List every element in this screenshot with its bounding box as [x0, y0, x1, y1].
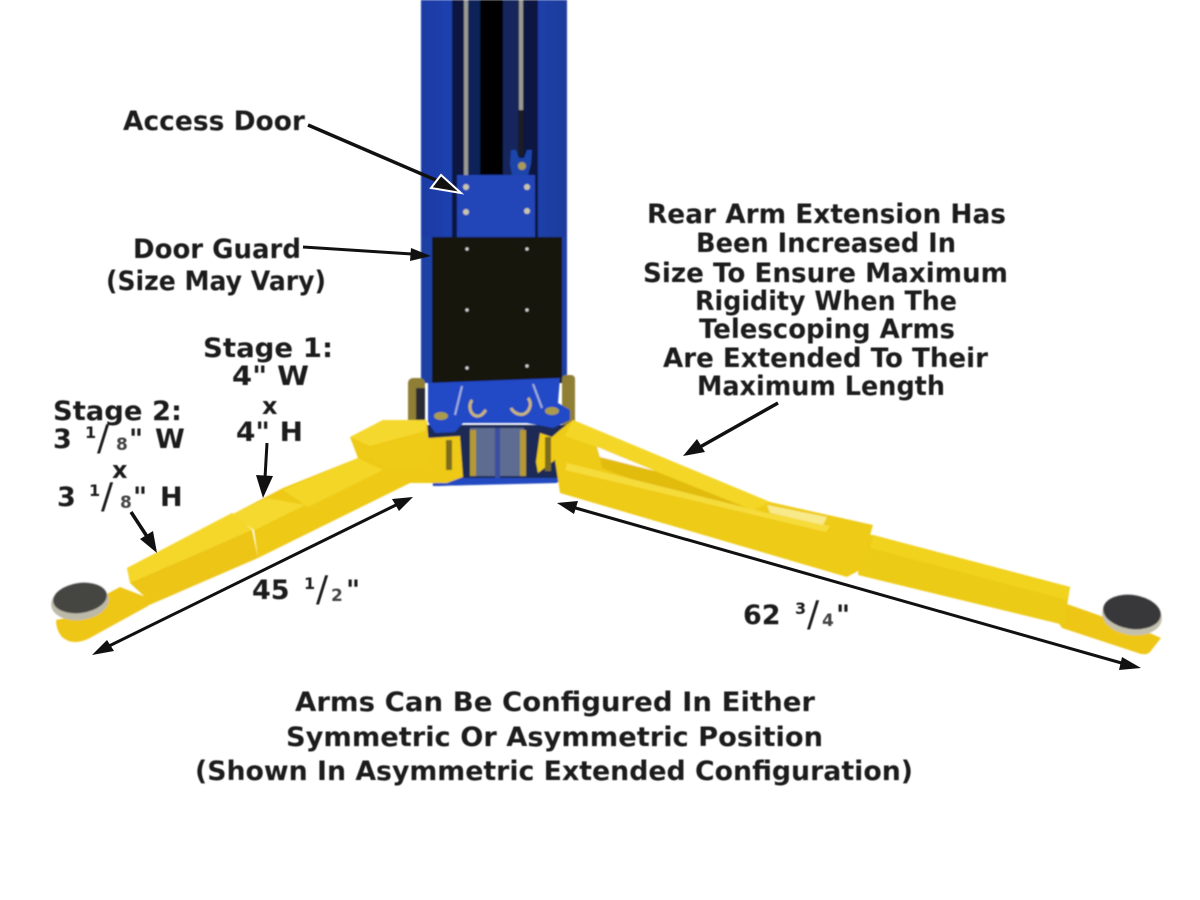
text labels — [53, 106, 1008, 787]
label: stage 2 dimensions: / — [97, 418, 110, 459]
text block: rear arm extension: Are Extended To Their — [663, 343, 989, 374]
label: stage 1 dimensions: 4" H — [236, 417, 303, 448]
label: stage 2 dimensions: x — [112, 456, 128, 484]
text block: arm configuration: Arms Can Be Configured In Either — [295, 687, 816, 718]
label: 45 1/2 inches: 2 — [331, 586, 343, 606]
label: 62 3/4 inches: / — [807, 594, 820, 635]
text block: arm configuration: (Shown In Asymmetric Extended Configuration) — [195, 756, 913, 787]
label: stage 2 dimensions: 3 — [53, 424, 72, 455]
text block: rear arm extension: Size To Ensure Maximum — [643, 258, 1008, 289]
arrow: door guard — [303, 247, 431, 261]
label: door guard: Door Guard — [133, 234, 301, 265]
right arm foot — [1058, 604, 1161, 654]
label: 45 1/2 inches: / — [316, 569, 329, 610]
label: stage 2 dimensions: / — [101, 476, 114, 517]
arrows and callout lines — [92, 125, 1141, 670]
label: stage 2 dimensions: 1 — [89, 481, 100, 500]
text block: rear arm extension: Rear Arm Extension Has — [647, 199, 1006, 230]
left arm stage 1 tube — [231, 420, 463, 558]
left arm stage 2 tube — [127, 513, 258, 606]
right telescoping arm — [536, 420, 1164, 654]
label: stage 2 dimensions: " — [133, 482, 147, 513]
right lift pad — [1100, 591, 1164, 639]
label: door guard: (Size May Vary) — [106, 266, 326, 297]
right arm extension tube — [858, 534, 1070, 625]
left lift pad — [49, 579, 111, 624]
label: stage 2 dimensions: H — [160, 482, 183, 513]
door guard plate — [421, 237, 567, 383]
label: stage 2 dimensions: 8 — [120, 493, 132, 513]
dimension arrow: 45 1/2 — [92, 497, 413, 655]
label: stage 1 dimensions: x — [262, 392, 278, 420]
label: stage 1 dimensions — [203, 333, 333, 448]
left arm foot — [56, 587, 148, 642]
text block: arm configuration: Symmetric Or Asymmetric Position — [286, 722, 823, 753]
label: stage 2 dimensions: 3 — [57, 482, 76, 513]
label: stage 2 dimensions — [53, 396, 185, 517]
post base — [408, 375, 575, 486]
dimension arrow: 62 3/4 — [557, 501, 1141, 670]
label: access door: Access Door — [123, 106, 306, 137]
arrow: rear arm extension — [683, 403, 778, 456]
left telescoping arm — [49, 420, 463, 642]
arrow: access door — [308, 125, 461, 193]
text block: rear arm extension — [643, 199, 1008, 402]
label: 45 1/2 inches: 1 — [304, 574, 315, 593]
text block: arm configuration — [195, 687, 913, 787]
label: door guard — [106, 234, 326, 297]
label: stage 1 dimensions: 4" W — [232, 361, 309, 392]
label: 62 3/4 inches: " — [836, 600, 850, 631]
label: 62 3/4 inches: 62 — [743, 600, 781, 631]
label: 62 3/4 inches: 4 — [822, 611, 834, 631]
label: stage 2 dimensions: 8 — [116, 435, 128, 455]
label: stage 1 dimensions: Stage 1: — [203, 333, 333, 364]
blue carriage bracket — [428, 378, 570, 433]
label: 62 3/4 inches: 3 — [795, 599, 806, 618]
label: stage 2 dimensions: Stage 2: — [53, 396, 182, 427]
text block: rear arm extension: Telescoping Arms — [699, 314, 955, 345]
text block: rear arm extension: Maximum Length — [697, 371, 945, 402]
label: stage 2 dimensions: 1 — [85, 423, 96, 442]
arrow: stage 1 — [256, 443, 273, 498]
label: stage 2 dimensions: W — [155, 424, 185, 455]
text block: rear arm extension: Been Increased In — [696, 228, 956, 259]
label: 45 1/2 inches: " — [346, 575, 360, 606]
label: stage 2 dimensions: " — [129, 424, 143, 455]
right arm main tube — [536, 420, 873, 577]
blue lift post — [421, 0, 567, 240]
access door — [457, 175, 535, 237]
right arm hub hardware — [545, 437, 551, 471]
right arm upper strut — [565, 420, 770, 510]
lift photo illustration — [49, 0, 1164, 654]
label: 45 1/2 inches: 45 — [252, 575, 290, 606]
right arm slot — [597, 447, 655, 471]
text block: rear arm extension: Rigidity When The — [695, 286, 957, 317]
arrow: stage 2 — [131, 512, 157, 553]
